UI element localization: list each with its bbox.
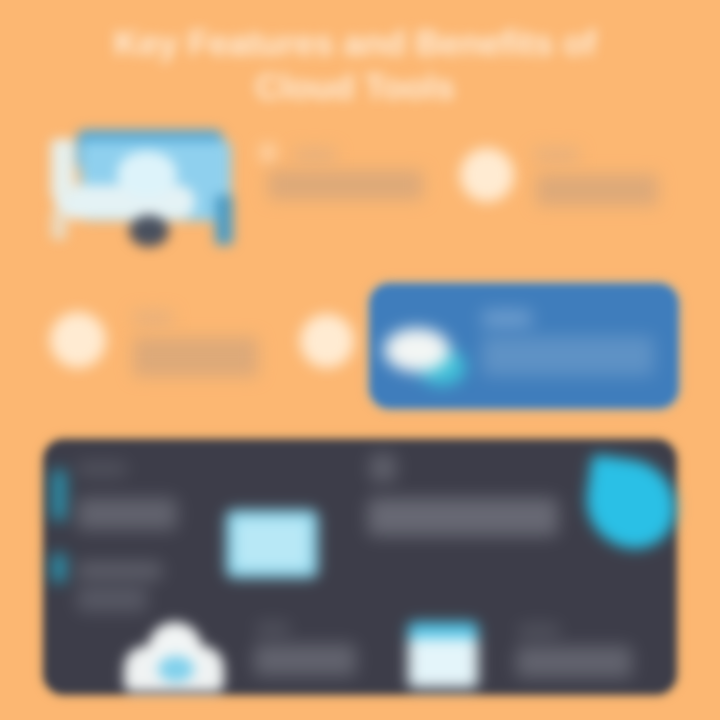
- dark panel text three: [361, 450, 565, 544]
- panel: blue highlight: [370, 284, 678, 408]
- icon: cloud in blue panel: [373, 316, 473, 394]
- feature one icon dot: [262, 145, 274, 161]
- dark panel text two: [74, 556, 164, 616]
- dark panel text four: [248, 621, 362, 682]
- dark panel left accent two: [52, 554, 66, 582]
- panel: dark lower: [44, 440, 676, 694]
- icon: cloud tablet: [408, 622, 478, 688]
- feature three description: [133, 337, 258, 377]
- blue panel heading: [482, 310, 532, 328]
- text block: feature two: [530, 146, 664, 212]
- dark panel text one: [70, 460, 183, 536]
- dark panel text five: [510, 622, 638, 684]
- icon: feature two circle: [460, 148, 514, 202]
- feature three heading: [133, 311, 173, 325]
- icon: cloud card: [226, 510, 318, 578]
- icon: cloud dashboard illustration: [42, 120, 242, 256]
- text block: feature three: [128, 309, 264, 382]
- icon: feature four circle: [300, 314, 354, 368]
- icon: feature three circle: [50, 312, 106, 368]
- icon: cyan leaf shape: [580, 454, 682, 554]
- text block: feature one: [254, 139, 428, 206]
- feature two description: [536, 174, 658, 206]
- feature one heading: [294, 148, 336, 162]
- title: Key Features and Benefits of: [114, 24, 596, 63]
- icon: white cloud dome: [114, 612, 234, 702]
- title: Cloud Tools: [255, 68, 455, 107]
- title: [108, 23, 602, 107]
- feature one description: [268, 170, 423, 200]
- blue panel description: [482, 336, 654, 376]
- feature two heading: [534, 148, 579, 162]
- dark panel left accent one: [52, 470, 66, 520]
